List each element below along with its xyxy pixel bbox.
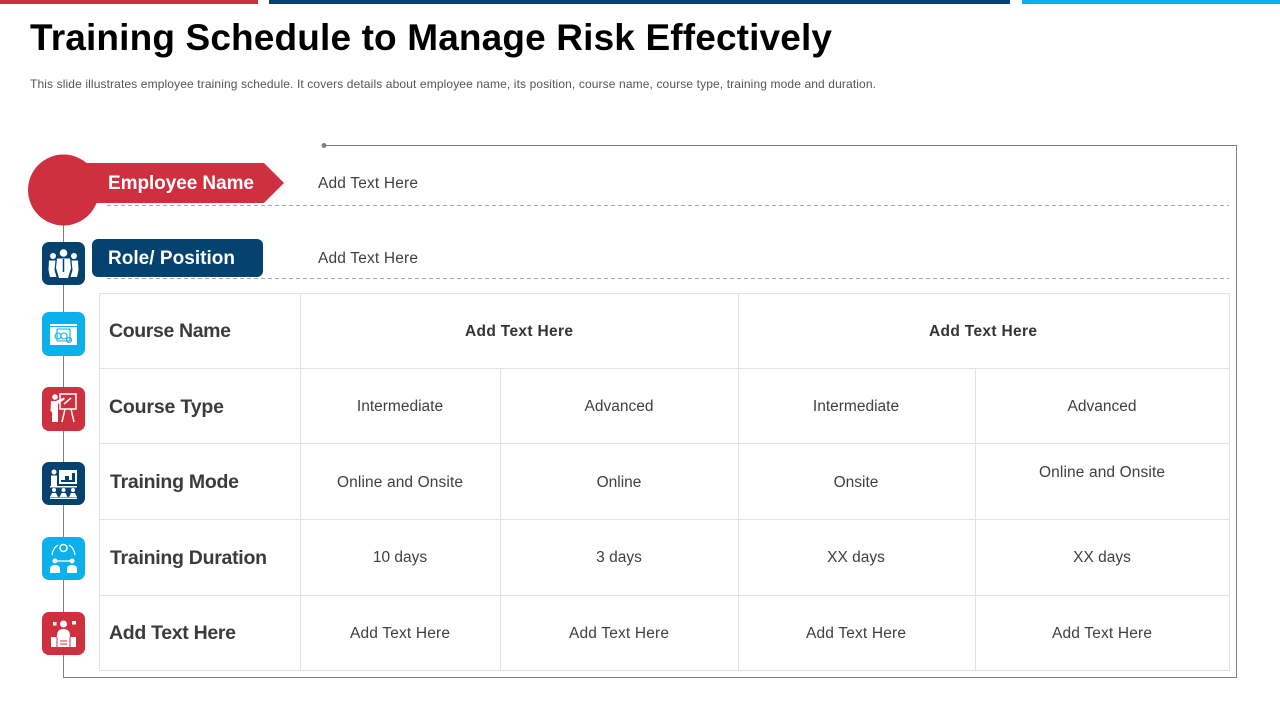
icon: team (42, 242, 85, 285)
row: course name (109, 320, 1037, 342)
row: course type: Course Type (109, 396, 224, 418)
dashed divider: employee name (107, 204, 1229, 206)
schedule table (100, 294, 1230, 670)
title: Training Schedule to Manage Risk Effectively (30, 17, 832, 58)
row: course type: Intermediate (357, 398, 443, 415)
row: training duration: 3 days (596, 549, 642, 566)
top accent bars (0, 0, 1280, 4)
row: training duration: 10 days (373, 549, 427, 566)
role position banner: Role/ Position (108, 248, 235, 269)
row: training duration: XX days (1073, 549, 1131, 566)
row: add text here: Add Text Here (569, 625, 669, 642)
row: training mode: Onsite (834, 474, 878, 491)
row: add text here (109, 622, 1152, 644)
row: course type: Advanced (1068, 398, 1136, 415)
row: add text here: Add Text Here (350, 625, 450, 642)
employee name banner: Employee Name (108, 173, 254, 194)
row: add text here: Add Text Here (1052, 625, 1152, 642)
row: training mode: Online and Onsite (337, 474, 463, 491)
row: course name: Course Name (109, 320, 231, 342)
role position banner (92, 239, 263, 277)
row: add text here: Add Text Here (806, 625, 906, 642)
icon: person at desk (42, 612, 85, 655)
row: course type (109, 396, 1136, 418)
row: training mode (110, 464, 1165, 493)
row: add text here: Add Text Here (109, 622, 236, 644)
table grid (100, 294, 1230, 670)
employee name value: Add Text Here (318, 175, 418, 192)
role position value: Add Text Here (318, 250, 418, 267)
icon: presenter with board (42, 387, 85, 431)
row: course type: Intermediate (813, 398, 899, 415)
row: training duration: Training Duration (110, 547, 267, 569)
row: course name: Add Text Here (465, 323, 573, 340)
icon: training audience (42, 462, 85, 505)
row: training duration (110, 547, 1131, 569)
icon: course window (42, 312, 85, 356)
dashed divider: role (107, 278, 1229, 280)
employee name banner (28, 154, 284, 226)
icon: two people sharing idea (42, 537, 85, 580)
frame connector line (64, 143, 1236, 678)
row: training mode: Online and Onsite (1039, 464, 1165, 481)
row: training mode: Online (597, 474, 641, 491)
row: course name: Add Text Here (929, 323, 1037, 340)
subtitle: This slide illustrates employee training schedule. It covers details about employee name, its position, course name, course type, training mode and duration. (30, 77, 876, 91)
row: training duration: XX days (827, 549, 885, 566)
row: training mode: Training Mode (110, 471, 239, 493)
row: course type: Advanced (585, 398, 653, 415)
